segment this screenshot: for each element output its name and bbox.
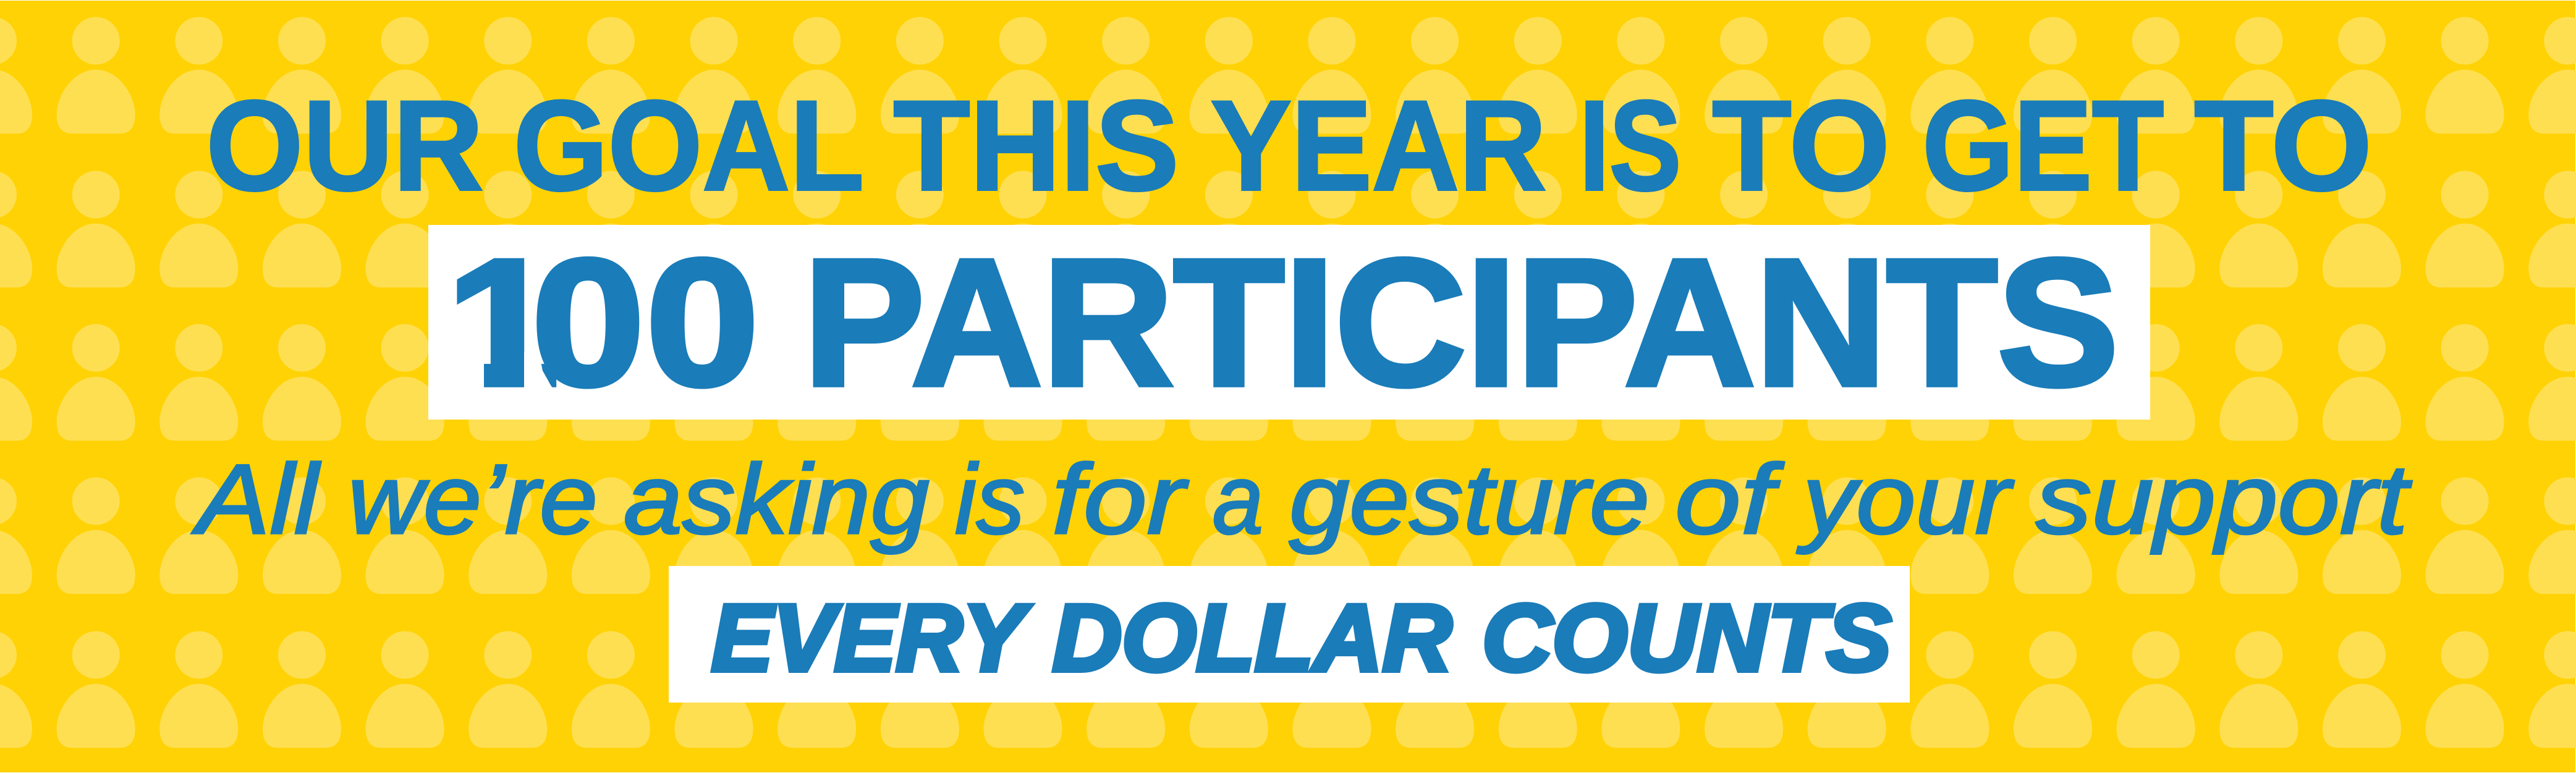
heading: our goal: GOAL (514, 74, 864, 217)
subheading: gesture of support: of (1675, 444, 1784, 554)
callout text: EVERY (711, 585, 1032, 691)
heading: our goal: YEAR (1211, 74, 1546, 217)
subheading: gesture of support: is (955, 444, 1025, 554)
callout text: COUNTS (1482, 585, 1891, 691)
headline number: PARTICIPANTS (803, 222, 2119, 423)
subheading: gesture of support: we’re (348, 444, 598, 554)
subheading: gesture of support: gesture (1289, 444, 1650, 554)
heading: our goal: IS (1579, 74, 1681, 217)
heading: our goal: THIS (894, 74, 1179, 217)
heading: our goal: TO (1712, 74, 1890, 217)
heading: our goal (206, 74, 2372, 217)
callout text (711, 585, 1891, 691)
heading: our goal: GET (1922, 74, 2164, 217)
white panel: 100 participants (428, 222, 2150, 423)
heading: our goal: TO (2194, 74, 2372, 217)
subheading: gesture of support: All (192, 444, 321, 554)
heading: our goal: OUR (206, 74, 483, 217)
headline number: 100 (446, 222, 759, 423)
white panel: every dollar counts (669, 566, 1910, 703)
subheading: gesture of support: for (1052, 444, 1189, 554)
subheading: gesture of support: your (1796, 444, 2014, 554)
subheading: gesture of support (192, 444, 2412, 554)
subheading: gesture of support: asking (624, 444, 930, 554)
subheading: gesture of support: a (1213, 444, 1263, 554)
callout text: DOLLAR (1053, 585, 1452, 691)
subheading: gesture of support: support (2036, 444, 2412, 554)
